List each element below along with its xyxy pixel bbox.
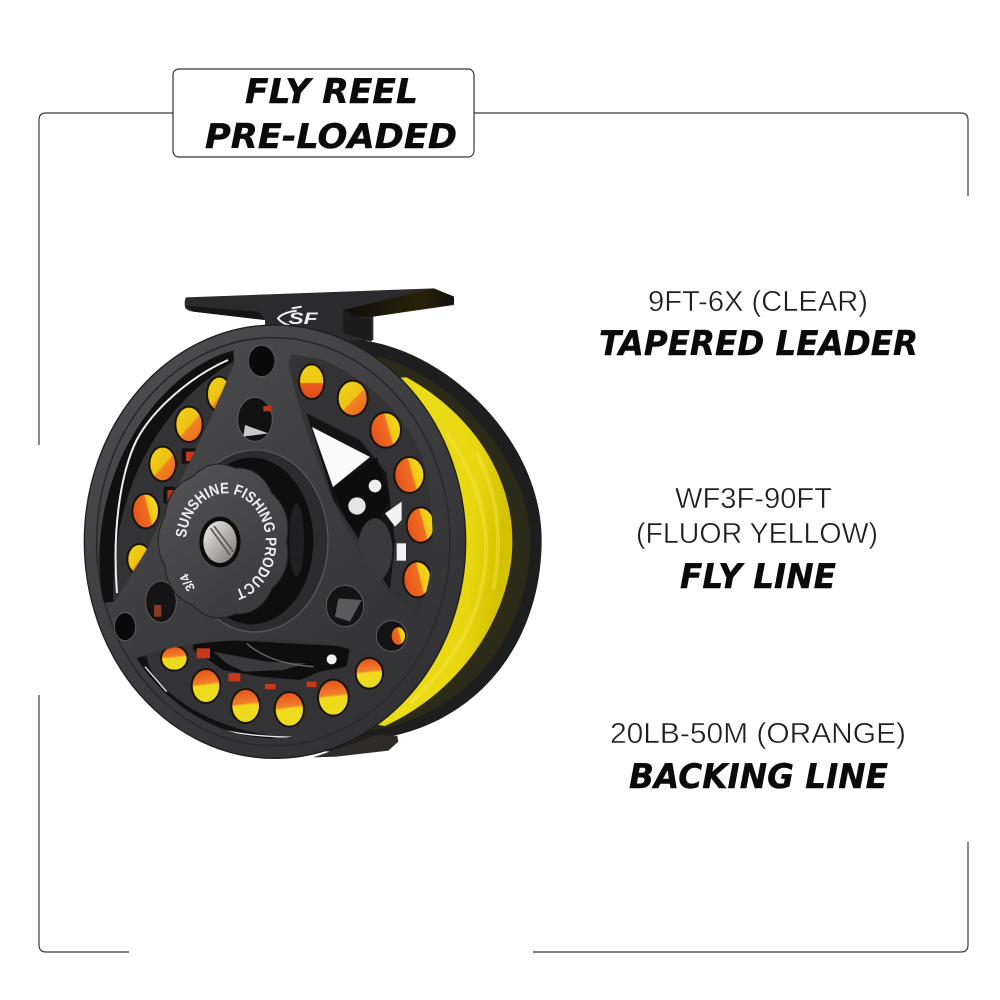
knob — [158, 464, 288, 618]
callout: tapered leader — [599, 286, 918, 364]
callout: fly line — [636, 483, 878, 597]
logo SF — [278, 307, 319, 328]
tail foot — [313, 735, 398, 757]
reel foot — [185, 288, 454, 343]
fly reel illustration — [84, 288, 542, 759]
callout: backing line: 20LB-50M (ORANGE) — [610, 718, 906, 750]
callout: tapered leader: TAPERED LEADER — [599, 324, 918, 364]
callout: backing line: BACKING LINE — [629, 757, 888, 797]
knob lettering: SUNSHINE FISHING PRODUCT — [176, 482, 276, 600]
outer frame border — [39, 113, 968, 952]
knob lettering: 3/4 — [177, 571, 198, 593]
title box — [173, 69, 474, 157]
yellow fly line — [313, 377, 512, 726]
right window — [288, 354, 432, 598]
back flange — [280, 340, 542, 753]
callout: fly line: FLY LINE — [680, 557, 836, 597]
title line 1: FLY REEL — [245, 72, 418, 112]
front flange — [84, 325, 466, 758]
logo SF: SF — [288, 309, 319, 328]
callout: tapered leader: 9FT-6X (CLEAR) — [648, 286, 868, 318]
callout: backing line — [610, 718, 906, 797]
upper-left window — [99, 350, 234, 602]
frame holes — [114, 345, 407, 651]
title line 2: PRE-LOADED — [205, 117, 457, 157]
screw — [199, 517, 241, 567]
hub — [182, 450, 328, 632]
callout: fly line: WF3F-90FT — [675, 483, 832, 515]
bottom window — [136, 640, 384, 738]
callout: fly line: (FLUOR YELLOW) — [636, 518, 878, 550]
